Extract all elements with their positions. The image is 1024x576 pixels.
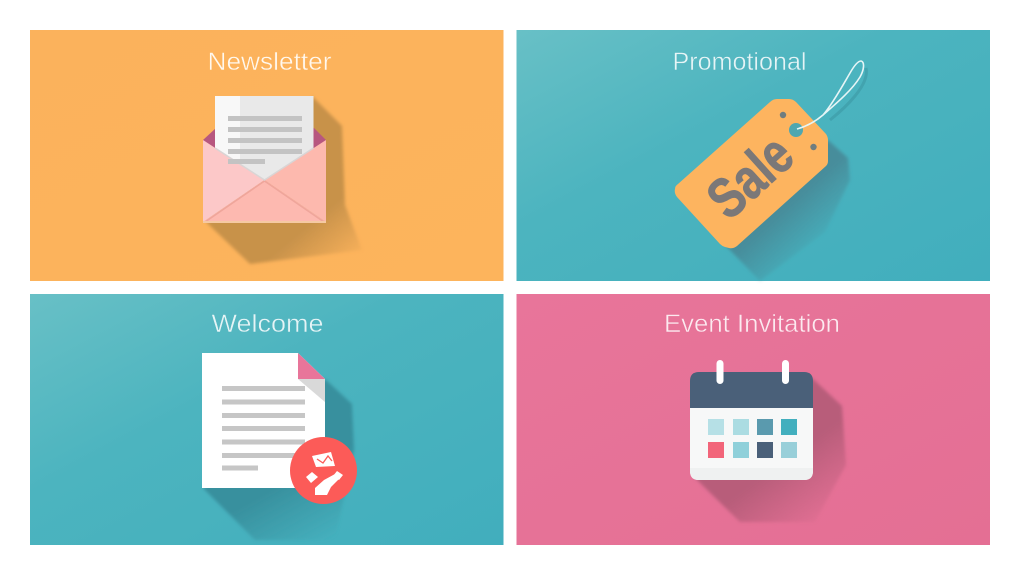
date squares [708, 419, 797, 458]
envelope back flap [203, 128, 326, 170]
binder rings [716, 360, 789, 384]
panel: welcome [30, 294, 504, 545]
tag holes [780, 112, 786, 118]
letter sheet [215, 96, 314, 180]
long shadow [725, 140, 850, 281]
panel: event invitation [516, 294, 990, 545]
icon: envelope with letter [203, 96, 362, 264]
heading: Promotional: Promotional [672, 48, 806, 76]
tag body [675, 99, 828, 248]
corner fold [298, 353, 325, 402]
icon: sale tag [675, 61, 866, 281]
heading: Event Invitation: Event Invitation [664, 310, 840, 338]
heading: Welcome: Welcome [212, 310, 324, 338]
icon: calendar [690, 360, 846, 522]
panel: promotional [516, 30, 990, 281]
long shadow [203, 379, 354, 540]
tag text: Sale: Sale [695, 122, 806, 231]
envelope front [203, 140, 326, 223]
document page [202, 353, 325, 488]
long shadow [695, 378, 846, 522]
long shadow [206, 97, 362, 264]
badge [290, 437, 357, 504]
calendar header [690, 372, 813, 408]
string loop [797, 61, 864, 129]
icon: document with handshake badge [202, 353, 357, 540]
calendar body [690, 408, 813, 480]
text lines [222, 386, 305, 470]
panel: newsletter [30, 30, 504, 281]
letter text lines [228, 116, 302, 164]
heading: Newsletter: Newsletter [208, 48, 332, 76]
